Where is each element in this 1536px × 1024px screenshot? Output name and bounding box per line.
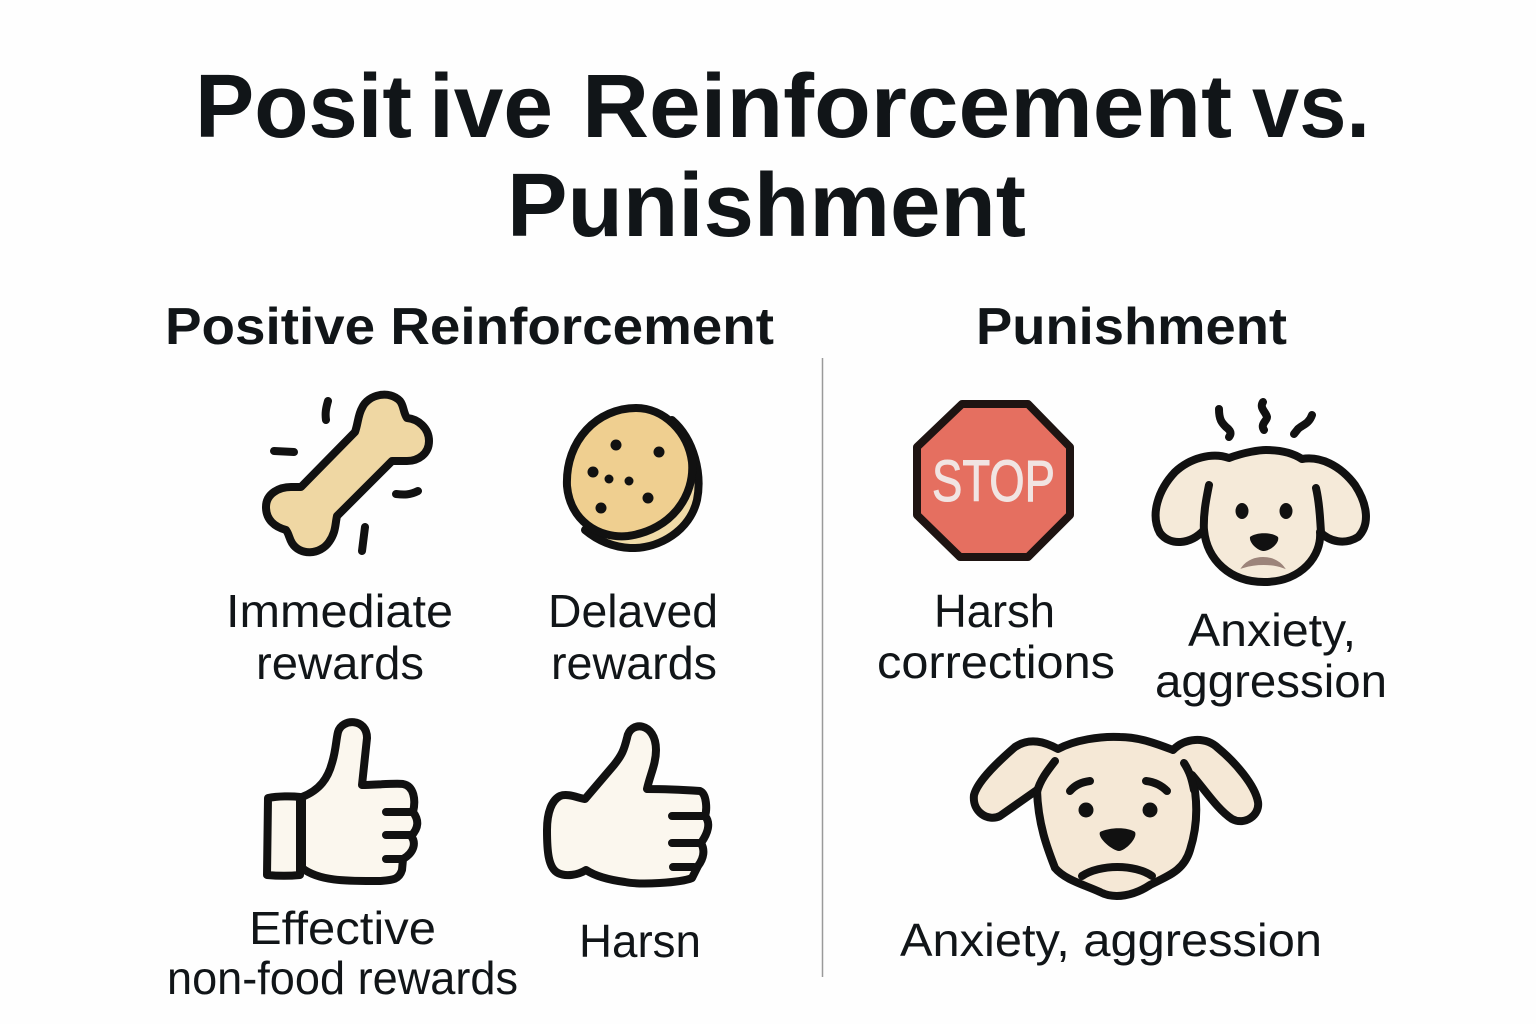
icon: thumbs up without cuff: [547, 726, 708, 883]
label: anxiety, aggression (upper): Anxiety,: [1188, 604, 1356, 656]
label: effective non-food rewards: Effective: [249, 902, 436, 954]
title: ive: [429, 57, 553, 157]
label: delayed rewards: Delaved: [548, 585, 718, 637]
label: immediate rewards: rewards: [256, 637, 424, 689]
label: delayed rewards: rewards: [551, 637, 717, 689]
label: immediate rewards: [226, 585, 453, 689]
icon: worried dog with stress marks: [1156, 402, 1366, 582]
label: harsh corrections: Harsh: [934, 585, 1055, 637]
icon: biscuit: [567, 408, 699, 548]
label: immediate rewards: Immediate: [226, 585, 453, 637]
label: anxiety, aggression (upper): aggression: [1155, 655, 1387, 707]
label: delayed rewards: [548, 585, 718, 689]
label: effective non-food rewards: non-food rewards: [167, 952, 518, 1004]
title: vs.: [1252, 57, 1370, 157]
title: Posit: [195, 57, 412, 157]
icon: stop sign: [917, 404, 1070, 557]
label: anxiety, aggression (lower): Anxiety, aggression: [900, 914, 1322, 966]
title: Punishment: [507, 156, 1026, 256]
label: harsh corrections: [877, 585, 1115, 688]
icon: stop sign: STOP: [932, 449, 1055, 514]
label: harsn: Harsn: [579, 915, 701, 967]
label: effective non-food rewards: [167, 902, 518, 1004]
heading: punishment: Punishment: [976, 298, 1287, 356]
label: anxiety, aggression (upper): [1155, 604, 1387, 707]
label: harsh corrections: corrections: [877, 636, 1115, 688]
heading: positive reinforcement: Positive Reinforcement: [165, 298, 774, 356]
icon: bone: [266, 395, 429, 552]
title: [195, 57, 1370, 256]
icon: thumbs up with cuff: [267, 722, 417, 881]
title: Reinforcement: [582, 57, 1232, 157]
icon: sad dog: [974, 737, 1258, 896]
